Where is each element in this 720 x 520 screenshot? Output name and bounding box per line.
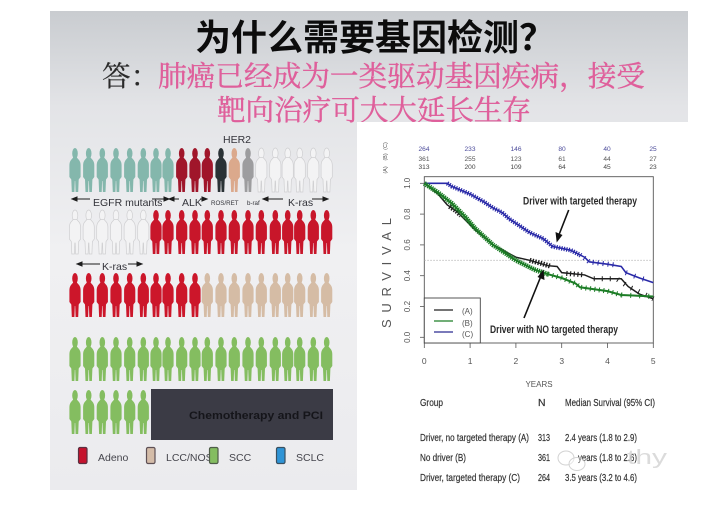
table row C: Driver, targeted therapy (C) (420, 473, 520, 484)
y axis: 0.4 (403, 270, 412, 281)
legend item: SCC (210, 448, 252, 464)
watermark (558, 447, 667, 470)
label: K-ras lower: K-ras (102, 261, 127, 273)
legend item: Adeno (78, 448, 129, 464)
annotation: driver with targeted therapy (523, 196, 638, 242)
panel: survival chart background (357, 122, 688, 490)
callout: chemotherapy and PCI (151, 389, 333, 440)
table row B: No driver (B) (420, 453, 466, 464)
at risk: group A (418, 164, 657, 171)
at risk: row labels: (B) (383, 153, 389, 161)
panel: patient pictogram (69, 148, 332, 434)
answer label: 答： (102, 54, 159, 95)
label: b-raf: b-raf (247, 200, 260, 207)
y axis: 0.6 (403, 239, 412, 250)
table row C (420, 473, 637, 484)
label: EGFR mutants: EGFR mutants (93, 197, 162, 209)
curve A: driver, no targeted therapy (424, 183, 653, 299)
table row A (420, 433, 637, 444)
label: HER2: HER2 (223, 134, 251, 146)
y axis (403, 177, 424, 343)
at risk: group C: 146 (510, 146, 522, 153)
table row A: 313 (538, 433, 550, 444)
at risk: group C: 233 (464, 146, 476, 153)
at risk: group B (418, 156, 657, 163)
at risk: group B: 123 (510, 156, 522, 163)
at risk: group A: 45 (603, 164, 611, 171)
table row B: 361 (538, 453, 550, 464)
y axis: 0.8 (403, 208, 412, 220)
annotation: driver with targeted therapy: Driver with targeted therapy (523, 196, 638, 208)
y axis: 0.2 (403, 300, 412, 312)
row 4: SCC (69, 337, 332, 381)
annotation: driver with no targeted therapy: Driver with NO targeted therapy (490, 324, 619, 336)
label: K-ras upper: K-ras (288, 197, 313, 209)
legend item: LCC/NOS (146, 448, 213, 464)
at risk: row labels (383, 142, 389, 174)
answer line two: 靶向治疗可大大延长生存 (217, 88, 531, 129)
at risk: group B: 27 (649, 156, 657, 163)
at risk: group A: 109 (510, 164, 522, 171)
arrow: EGFR range (72, 197, 169, 201)
answer text (102, 54, 645, 129)
curve B: no driver (424, 183, 653, 296)
numbers at risk (383, 142, 657, 174)
at risk: group C: 40 (603, 146, 611, 153)
title: 为什么需要基因检测？ (195, 9, 555, 61)
chart legend: (A) (462, 307, 473, 316)
at risk: group C (418, 146, 657, 153)
label: ROS/RET: ROS/RET (211, 200, 239, 207)
plot frame (424, 177, 653, 343)
x axis: 0 (422, 356, 427, 366)
row 3: adeno and LCC/NOS (69, 273, 332, 317)
legend item: SCLC: SCLC (296, 452, 324, 464)
survival chart (379, 142, 657, 389)
arrow: K-ras lower range (77, 262, 142, 266)
at risk: group C: 264 (418, 146, 430, 153)
table: median survival (420, 398, 655, 484)
at risk: group A: 64 (558, 164, 566, 171)
arrow: ALK range (169, 197, 207, 201)
row 2: K-ras outlines and adeno (69, 210, 332, 254)
legend item: SCC: SCC (229, 452, 252, 464)
label: ALK: ALK (182, 197, 202, 209)
answer line one: 肺癌已经成为一类驱动基因疾病，接受 (158, 54, 645, 95)
at risk: row labels: (A) (383, 166, 389, 174)
at risk: group A: 313 (418, 164, 430, 171)
callout: chemotherapy and PCI: Chemotherapy and PCI (189, 410, 323, 422)
x axis: 4 (605, 356, 610, 366)
pictogram labels (93, 134, 313, 273)
at risk: group A: 200 (464, 164, 476, 171)
y axis: 1.0 (403, 177, 412, 189)
y axis: 0.0 (403, 331, 412, 343)
median reference line (424, 259, 653, 261)
arrow: K-ras upper range (263, 197, 328, 201)
at risk: group B: 255 (464, 156, 476, 163)
table row A: 2.4 years (1.8 to 2.9) (565, 433, 637, 444)
at risk: group B: 361 (418, 156, 430, 163)
curve C: driver with targeted therapy (424, 183, 653, 283)
range arrows (72, 197, 328, 266)
legend item: LCC/NOS: LCC/NOS (166, 452, 213, 464)
at risk: group A: 23 (649, 164, 657, 171)
table header: N (538, 398, 546, 409)
table row C: 3.5 years (3.2 to 4.6) (565, 473, 637, 484)
legend item: Adeno: Adeno (98, 452, 129, 464)
x axis (422, 343, 656, 366)
x axis: 2 (514, 356, 519, 366)
table header: Median Survival (95% CI) (565, 398, 655, 409)
y axis title: SURVIVAL (379, 218, 394, 328)
legend: histology (78, 448, 324, 464)
annotation: driver with no targeted therapy (490, 270, 619, 336)
row 1: EGFR, ALK, HER2, ROS/RET, b-raf, K-ras (69, 148, 332, 192)
watermark: thy (627, 447, 667, 469)
x axis: 3 (559, 356, 564, 366)
at risk: group B: 61 (558, 156, 566, 163)
x axis title: YEARS (525, 380, 553, 389)
table row A: Driver, no targeted therapy (A) (420, 433, 529, 444)
table row B (420, 453, 637, 464)
at risk: group C: 80 (558, 146, 566, 153)
chart legend (424, 298, 480, 343)
chart legend: (B) (462, 319, 473, 328)
chart legend: (C) (462, 330, 473, 339)
at risk: group C: 25 (649, 146, 657, 153)
x axis: 5 (651, 356, 656, 366)
at risk: row labels: (C) (383, 142, 389, 150)
legend item: SCLC (276, 448, 324, 464)
table header: Group (420, 398, 443, 409)
x axis: 1 (468, 356, 473, 366)
row 5: SCC (69, 390, 149, 434)
at risk: group B: 44 (603, 156, 611, 163)
survival curves (424, 183, 653, 299)
table row B: years (1.8 to 2.6) (578, 453, 637, 464)
table row C: 264 (538, 473, 550, 484)
table header (420, 398, 655, 409)
